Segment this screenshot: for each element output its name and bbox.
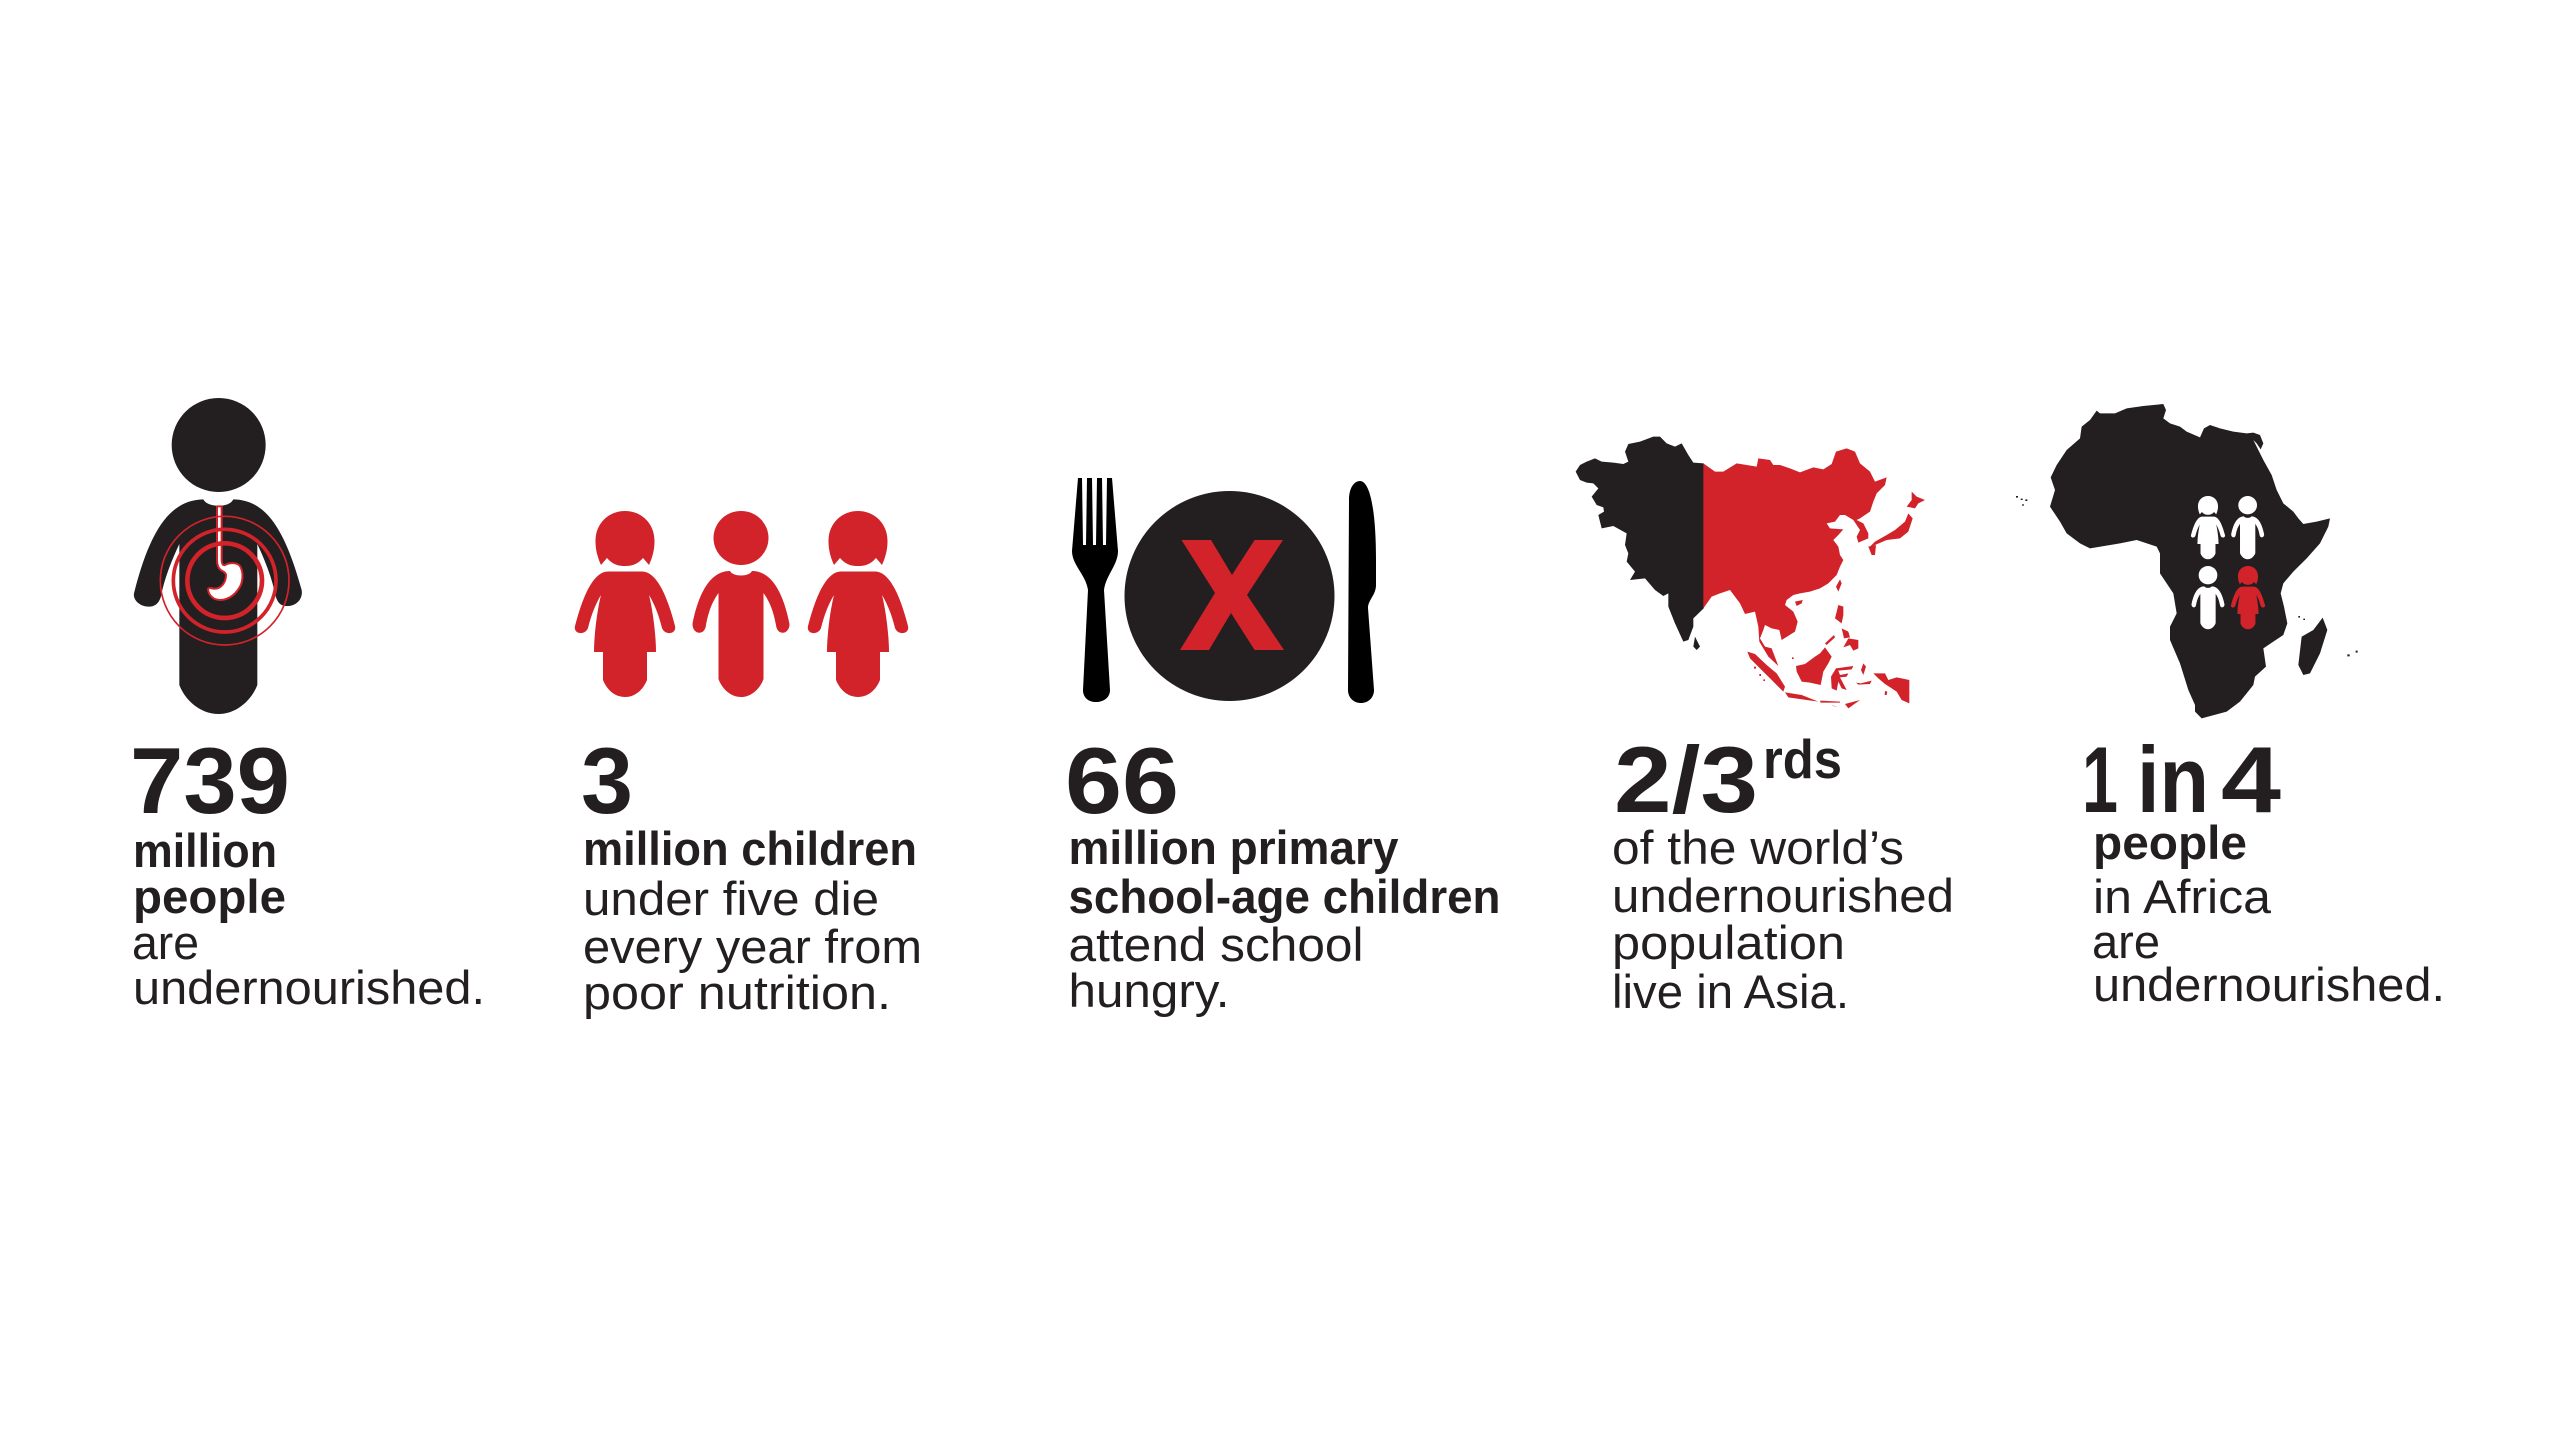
icon: person with stomach and red rings [134,398,302,714]
text block: million primary school-age children: school-age children [1068,870,1500,923]
number: 2/3 rds [1614,727,1842,832]
text block: million primary school-age children: million primary [1068,821,1398,874]
panel: 66 million school-age children [1065,478,1500,1017]
text block: of the world's undernourished population: undernourished [1612,869,1954,922]
text block: million people are undernourished: are [132,916,199,969]
text block: of the world's undernourished population: live in Asia. [1612,965,1849,1018]
number: 1 in 4: in [2137,727,2209,832]
number: 2/3 rds: rds [1763,728,1842,790]
number: 739: 739 [130,728,290,833]
text block: million children under five die: million children [583,822,917,875]
text block: of the world's undernourished population: of the world’s [1612,821,1904,874]
text block: people in Africa are undernourished [2092,816,2445,1011]
number: 1 in 4: 1 [2082,727,2118,832]
number: 1 in 4 [2082,727,2281,832]
text block: million primary school-age children: hungry. [1068,964,1230,1017]
text block: million children under five die: under five die [583,872,879,925]
number: 1 in 4: 4 [2221,727,2281,832]
text block: people in Africa are undernourished: in Africa [2093,870,2272,923]
text block: million children under five die: every year from [583,920,922,973]
number: 66: 66 [1065,728,1179,833]
islands: Southeast Asia [1747,579,1909,708]
text block: of the world's undernourished population [1612,821,1954,1018]
text block: people in Africa are undernourished: undernourished. [2093,958,2445,1011]
panel: two thirds in Asia [1576,437,1954,1018]
text block: people in Africa are undernourished: are [2092,915,2160,968]
text block: million primary school-age children: attend school [1068,918,1364,971]
text block: million children under five die: poor nutrition. [583,966,891,1019]
icon: plate with red X [1124,491,1334,701]
islands: Japan [1868,492,1925,555]
number: 3: 3 [581,728,633,833]
panel: 3 million children [575,511,922,1019]
panel: 1 in 4 in Africa [2016,404,2445,1011]
text block: million people are undernourished: undernourished. [133,961,485,1014]
icon: three red children [575,511,908,697]
text block: million people are undernourished [132,824,485,1014]
icon: fork [1072,478,1118,702]
text block: million primary school-age children [1068,821,1500,1017]
text block: million children under five die [583,822,922,1019]
number: 2/3 rds: 2/3 [1614,727,1758,832]
icon: knife [1348,481,1376,703]
text block: million people are undernourished: million [133,824,277,877]
text block: people in Africa are undernourished: people [2093,816,2247,869]
map: Africa with four figures [2016,404,2358,718]
map: Asia, black and red [1576,437,1925,708]
text block: million people are undernourished: people [133,870,286,923]
panel: 739 million undernourished [130,398,485,1014]
text block: of the world's undernourished population: population [1612,916,1845,969]
